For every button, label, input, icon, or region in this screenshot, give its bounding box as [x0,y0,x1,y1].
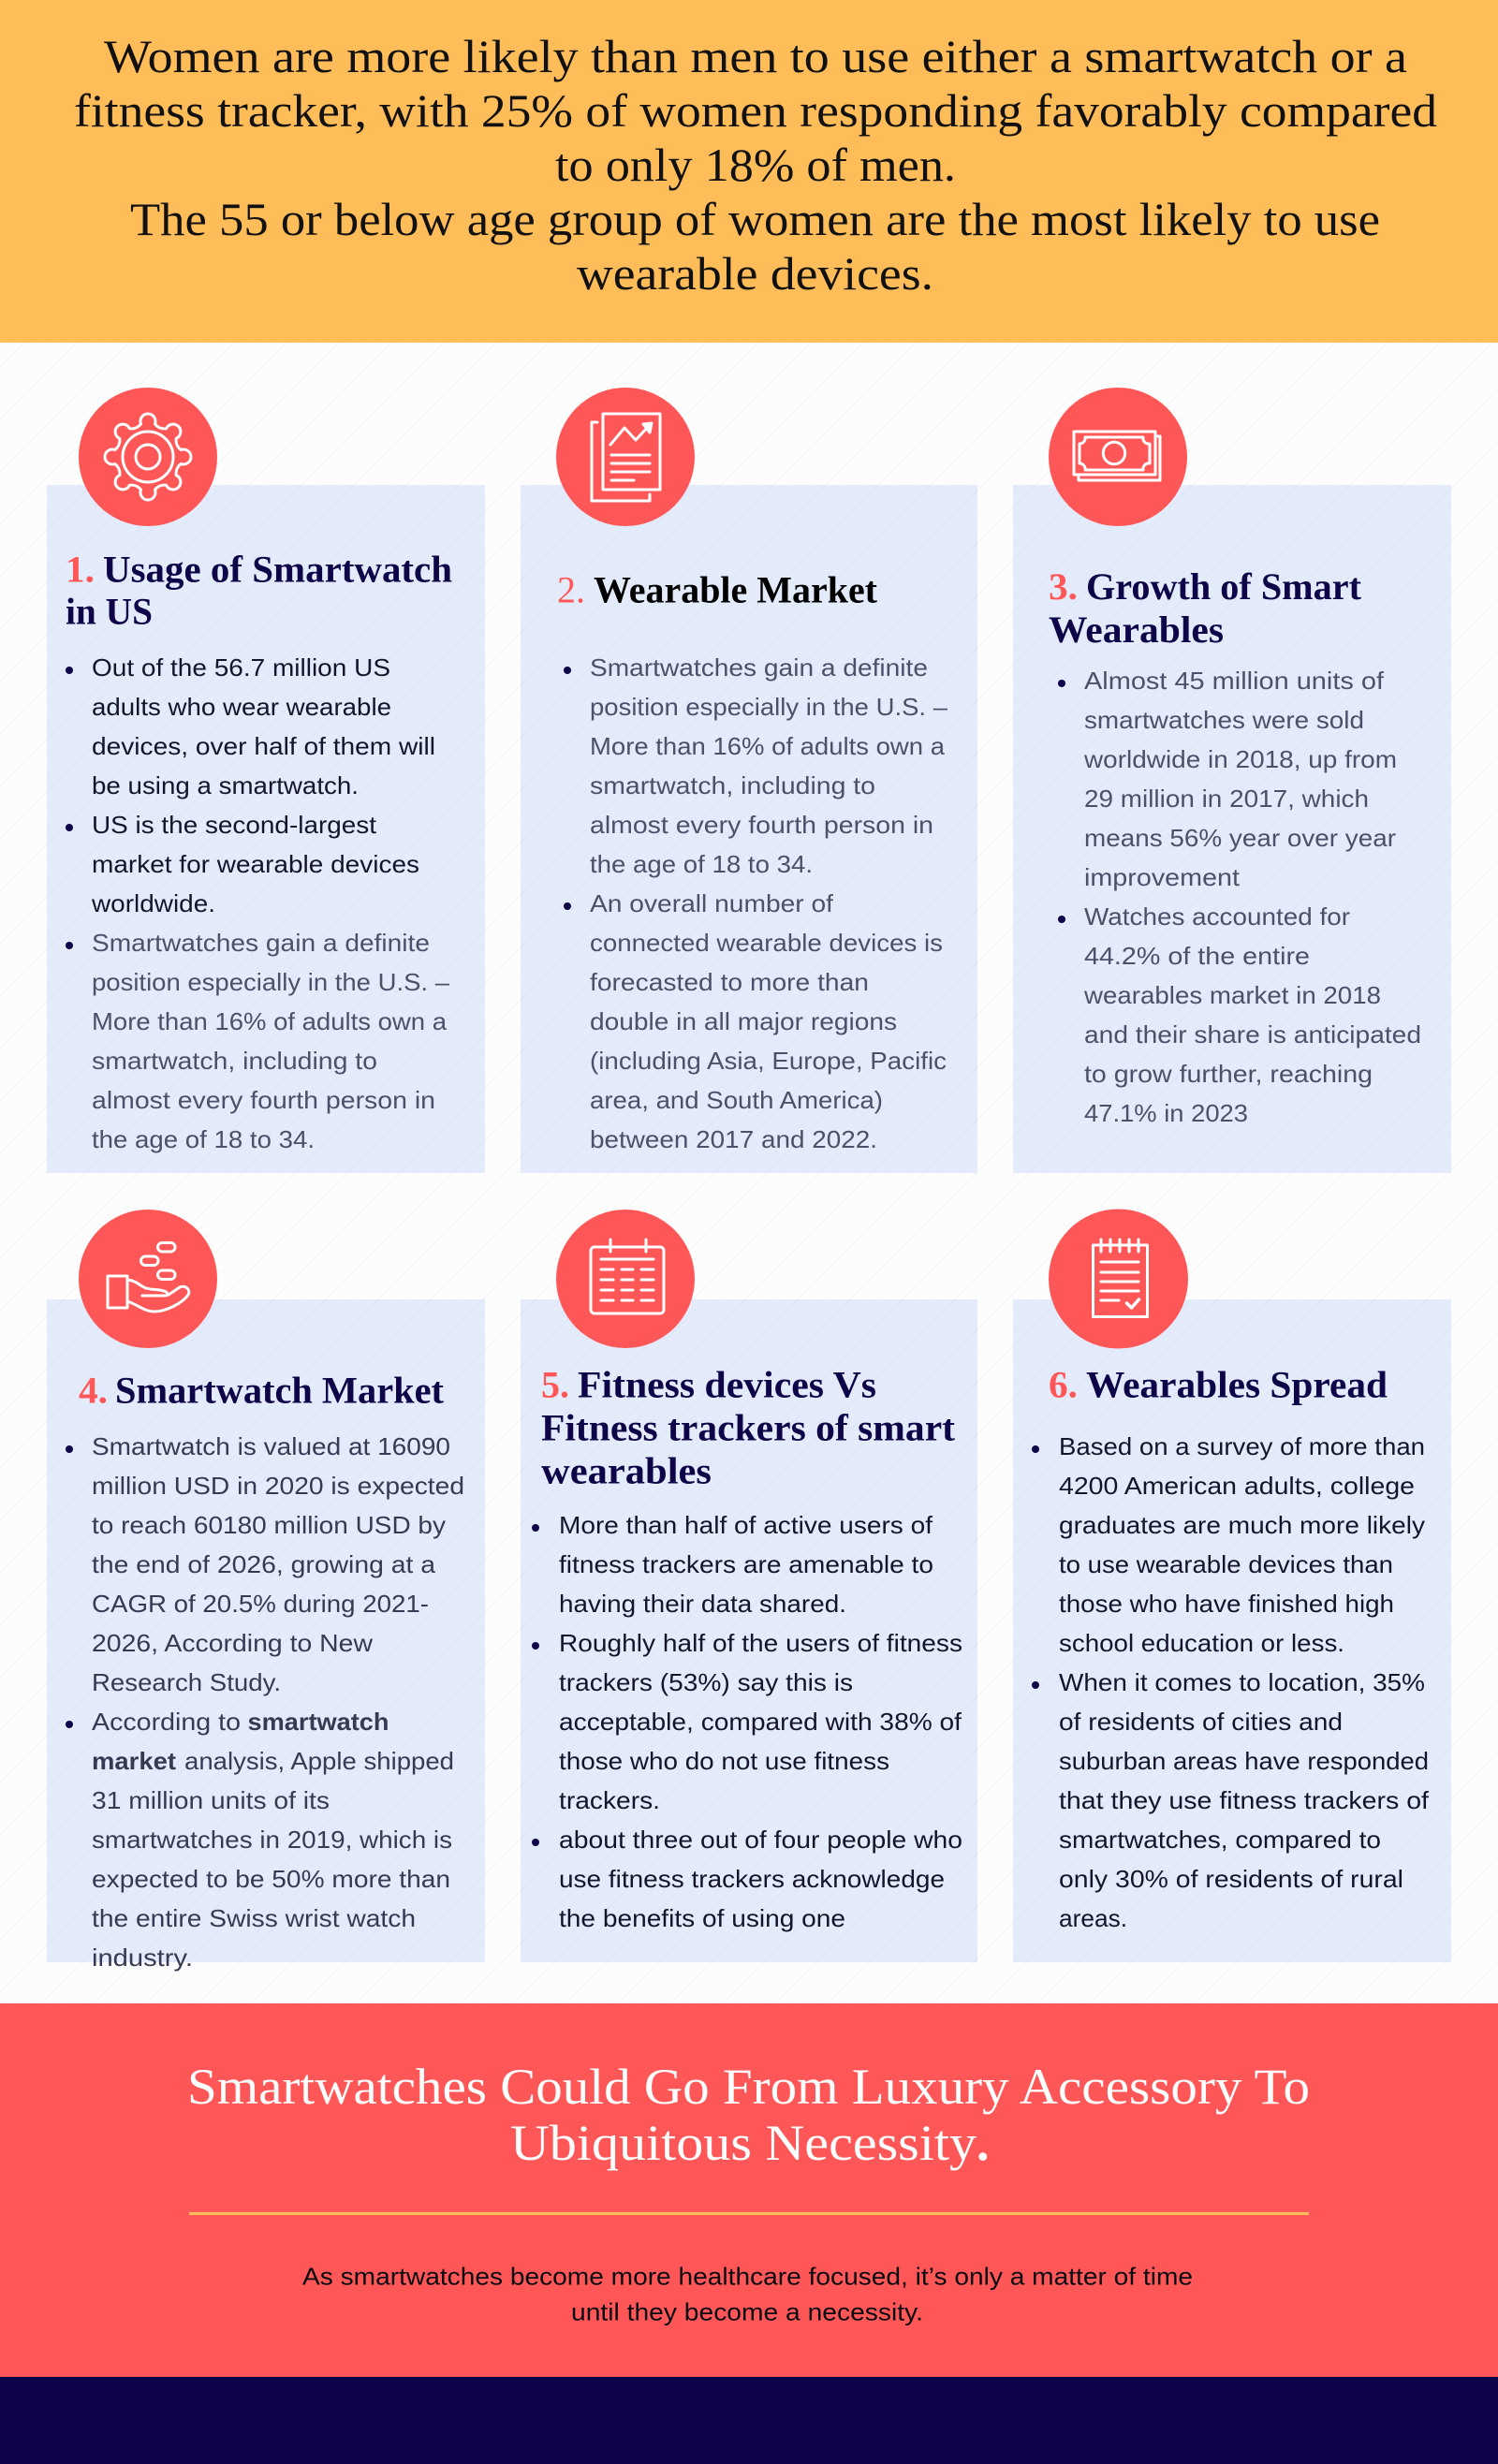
heading: 1: Usage of Smartwatch [103,549,452,590]
header banner: fitness tracker, with 25% of women responding favorably compared [74,84,1437,137]
bullet list: 4: CAGR of 20.5% during 2021- [92,1590,429,1618]
bullet list: 6: 4200 American adults, college [1059,1472,1415,1500]
bullet list: 6: only 30% of residents of rural [1059,1865,1403,1893]
bullet list: 1: Smartwatches gain a definite [92,929,430,957]
heading: 3 [1049,565,1362,651]
bullet list: 4: 31 million units of its [92,1786,330,1814]
bullet list: 6: those who have finished high [1059,1590,1394,1618]
heading: 4: Smartwatch Market [115,1369,445,1412]
bullet list: 5: those who do not use fitness [559,1747,889,1775]
bullet list: 5 [532,1511,962,1932]
bullet list: 4: market [92,1747,176,1775]
bullet list: 6: to use wearable devices than [1059,1550,1393,1578]
bullet list: 1: adults who wear wearable [92,693,391,721]
bullet list: 6: areas. [1059,1904,1127,1932]
bullet list: 2: More than 16% of adults own a [590,732,946,760]
bullet list: 4: According to [92,1708,241,1736]
panel: 2 wearable market [521,388,977,1173]
bullet list: 6: of residents of cities and [1059,1708,1343,1736]
bullet list: 2: position especially in the U.S. – [590,693,948,721]
bullet list: 3: 44.2% of the entire [1084,942,1310,970]
bullet list: 2: double in all major regions [590,1007,897,1035]
bullet list: 1: Out of the 56.7 million US [92,653,390,682]
bullet list: 5: fitness trackers are amenable to [559,1550,933,1578]
bullet list: 1: almost every fourth person in [92,1086,435,1114]
header banner: wearable devices. [577,247,933,300]
bullet list: 5: trackers (53%) say this is [559,1668,853,1696]
bullet list: 3: wearables market in 2018 [1083,981,1381,1009]
bullet list: 6: school education or less. [1059,1629,1344,1657]
bullet list: 1: smartwatch, including to [92,1047,377,1075]
panel: 3 growth of smart wearables [1013,388,1451,1173]
bullet list: 2: Smartwatches gain a definite [590,653,928,682]
bullet list: 1: US is the second-largest [92,811,377,839]
heading: 5: 5. [541,1363,569,1406]
footer banner [0,2003,1498,2377]
heading: 1: 1. [66,549,95,590]
bullet list: 2: An overall number of [590,889,834,917]
heading: 6: Wearables Spread [1086,1363,1388,1406]
bullet list: 5: acceptable, compared with 38% of [559,1708,962,1736]
bullet list: 3: means 56% year over year [1084,824,1396,852]
bullet list: 6: suburban areas have responded [1059,1747,1429,1775]
heading: 5: Fitness trackers of smart [541,1406,956,1449]
bullet list: 6: graduates are much more likely [1059,1511,1425,1539]
bullet list: 4: the end of 2026, growing at a [92,1550,436,1578]
bullet list: 4: smartwatch [247,1708,389,1736]
bullet list: 1: More than 16% of adults own a [92,1007,448,1035]
heading: 2: 2. [557,569,585,610]
bullet list: 4: Research Study. [92,1668,281,1696]
heading: 2: Wearable Market [594,569,878,610]
heading: 3: 3. [1049,565,1078,608]
bullet list: 6: When it comes to location, 35% [1059,1668,1425,1696]
footer text: until they become a necessity. [571,2297,923,2325]
bullet list: 3: Almost 45 million units of [1084,667,1385,695]
bullet list: 5: Roughly half of the users of fitness [559,1629,962,1657]
heading: 1 [66,549,452,633]
heading: 6: 6. [1049,1363,1078,1406]
bullet list: 4: to reach 60180 million USD by [92,1511,446,1539]
heading: 5: wearables [541,1449,712,1492]
bullet list: 4: smartwatches in 2019, which is [92,1826,452,1854]
bullet list: 1 [66,653,450,1153]
heading: 4: 4. [79,1369,108,1412]
bullet list: 2: area, and South America) [590,1086,883,1114]
bullet list: 3 [1058,667,1421,1127]
bullet list: 6: smartwatches, compared to [1059,1826,1381,1854]
bullet list: 2: the age of 18 to 34. [590,850,813,878]
icon: calendar [556,1210,695,1348]
bullet list: 5: use fitness trackers acknowledge [559,1865,945,1893]
bullet list: 3: 29 million in 2017, which [1084,785,1369,813]
header banner: Women are more likely than men to use either a smartwatch or a [104,30,1407,82]
bullet list: 6: that they use fitness trackers of [1059,1786,1430,1814]
heading: 5: Fitness devices Vs [578,1363,876,1406]
icon: notepad with check [1049,1210,1188,1348]
heading: 3: Growth of Smart [1086,565,1362,608]
bullet list: 4: analysis, Apple shipped [184,1747,454,1775]
bullet list: 4: 2026, According to New [92,1629,373,1657]
bullet list: 6: Based on a survey of more than [1059,1432,1425,1460]
heading: 3: Wearables [1049,609,1224,651]
bullet list: 5: the benefits of using one [559,1904,845,1932]
bullet list: 3: smartwatches were sold [1084,706,1364,734]
bullet list: 3: to grow further, reaching [1084,1060,1373,1088]
bullet list: 2: almost every fourth person in [590,811,933,839]
bullet list: 3: Watches accounted for [1084,902,1350,931]
bullet list: 3: worldwide in 2018, up from [1083,745,1397,773]
header banner: to only 18% of men. [555,139,956,191]
header banner: The 55 or below age group of women are the most likely to use [130,193,1380,245]
footer text [302,2262,1193,2325]
footer heading: Smartwatches Could Go From Luxury Accessory To [187,2059,1310,2115]
bullet list: 3: 47.1% in 2023 [1084,1099,1248,1127]
navy bottom bar [0,2377,1498,2464]
header banner [0,0,1498,343]
panel: 1 usage of smartwatch [47,388,485,1173]
bullet list: 4 [66,1432,464,1972]
bullet list: 2: forecasted to more than [590,968,869,996]
footer heading: Ubiquitous Necessity [510,2115,977,2171]
bullet list: 1: be using a smartwatch. [92,771,359,799]
footer heading: . [977,2115,989,2171]
panel: 4 smartwatch market [47,1210,485,1972]
bullet list: 4: expected to be 50% more than [92,1865,450,1893]
bullet list: 1: market for wearable devices [92,850,419,878]
footer text: As smartwatches become more healthcare focused, it’s only a matter of time [302,2262,1193,2290]
icon: hand with coins [79,1210,217,1348]
bullet list: 2: (including Asia, Europe, Pacific [590,1047,947,1075]
bullet list: 4: million USD in 2020 is expected [92,1472,464,1500]
bullet list: 4: Smartwatch is valued at 16090 [92,1432,450,1460]
bullet list: 4: industry. [92,1943,193,1972]
bullet list: 2 [564,653,948,1153]
icon: banknotes [1049,388,1187,526]
bullet list: 3: and their share is anticipated [1084,1020,1421,1049]
bullet list: 2: connected wearable devices is [590,929,943,957]
bullet list: 1: devices, over half of them will [92,732,435,760]
bullet list: 5: trackers. [559,1786,660,1814]
bullet list: 5: about three out of four people who [559,1826,962,1854]
icon: gear [79,388,217,526]
bullet list: 6 [1032,1432,1430,1932]
bullet list: 5: More than half of active users of [559,1511,933,1539]
panel: 6 wearables spread [1013,1210,1451,1962]
bullet list: 2: smartwatch, including to [590,771,875,799]
icon: report with chart [556,388,695,526]
heading: 5 [541,1363,956,1492]
bullet list: 1: worldwide. [91,889,215,917]
bullet list: 4: the entire Swiss wrist watch [92,1904,416,1932]
bullet list: 1: position especially in the U.S. – [92,968,450,996]
panel: 5 fitness devices vs trackers [521,1210,977,1962]
footer heading [187,2059,1310,2171]
bullet list: 5: having their data shared. [559,1590,846,1618]
bullet list: 1: the age of 18 to 34. [92,1125,315,1153]
bullet list: 2: between 2017 and 2022. [590,1125,877,1153]
bullet list: 3: improvement [1084,863,1241,891]
heading: 1: in US [66,590,153,633]
